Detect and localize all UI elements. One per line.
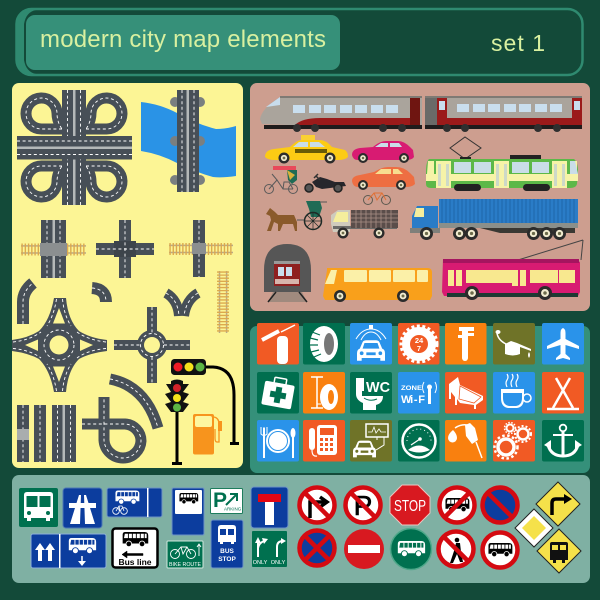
road with rail crossing <box>21 220 86 278</box>
sign: only lanes: ONLY <box>271 560 286 566</box>
merging road <box>166 293 198 316</box>
icon: WC <box>350 372 392 414</box>
icon: fire extinguisher <box>257 323 299 364</box>
icon: fuel nozzle <box>445 420 486 462</box>
vertical rail track <box>217 271 229 333</box>
panel: vehicles <box>250 83 590 311</box>
sign: stop: STOP <box>394 498 426 515</box>
sign: no right turn <box>300 488 334 522</box>
icon: 24/7 service: 7 <box>417 344 421 353</box>
straight road with crosswalk <box>17 405 29 462</box>
sign: lanes with bus <box>31 534 106 568</box>
sweeping road <box>110 379 158 428</box>
sign: bus stop: BUS <box>220 548 235 555</box>
icon: telephone <box>303 420 345 462</box>
icon: tyre <box>303 323 345 364</box>
title banner <box>26 15 340 70</box>
sign: no parking <box>346 488 380 522</box>
icon: camping tent <box>542 372 584 414</box>
sign: only lanes: ONLY <box>253 560 268 566</box>
small bend <box>92 288 106 302</box>
icon: airplane <box>542 323 584 364</box>
icon: WC: WC <box>366 379 390 396</box>
curved road <box>23 283 33 324</box>
sign: bus route <box>390 528 432 570</box>
sign: no pedestrians <box>438 532 474 566</box>
sign: parking <box>210 488 242 514</box>
icon: 24/7 service: 24 <box>415 336 424 345</box>
trolleybus <box>442 240 583 300</box>
sign: bike route: BIKE ROUTE <box>169 562 202 568</box>
bicycle <box>364 193 390 204</box>
overpass over river <box>141 90 236 192</box>
traffic light on arm <box>171 359 239 445</box>
straight road <box>34 405 46 462</box>
icon: car wash <box>350 323 392 364</box>
icon: anchor <box>542 420 584 462</box>
sign: priority road <box>515 509 553 547</box>
icon: fuel pump <box>193 414 222 454</box>
container truck <box>410 199 578 240</box>
orange car <box>352 167 415 190</box>
title: modern city map elements <box>40 26 326 53</box>
sign: no stopping <box>300 530 334 566</box>
small roundabout <box>114 307 190 383</box>
sign: green bus <box>19 488 58 527</box>
high speed train <box>260 96 582 132</box>
cloverleaf interchange <box>17 90 132 205</box>
sign: no buses <box>440 488 474 522</box>
crossroad <box>96 220 154 278</box>
orange bus <box>323 268 432 302</box>
icon: wi-fi zone <box>398 372 440 414</box>
cycle rickshaw <box>264 166 298 194</box>
icon: wi-fi zone: ZONE <box>401 385 423 392</box>
sign: bus stop: STOP <box>218 556 236 563</box>
traffic light on pole <box>165 380 189 465</box>
sign: bus warning <box>537 529 581 573</box>
sign: bus line <box>112 528 158 568</box>
icon: speedometer <box>398 420 440 462</box>
sign: dead end <box>251 487 288 528</box>
sign: no entry <box>344 529 384 569</box>
flatbed truck <box>331 210 398 238</box>
sign: bend warning <box>536 482 580 526</box>
icon: bed <box>445 372 486 414</box>
horse and carriage <box>266 201 327 231</box>
icon: gears <box>493 420 535 462</box>
sign: parking: P <box>213 489 227 512</box>
icon: coffee cup <box>493 372 535 414</box>
icon: oil can <box>493 323 535 364</box>
icon: restaurant <box>257 420 299 462</box>
sign: only lanes <box>252 531 287 567</box>
sign: no parking: P <box>354 490 372 521</box>
icon: 24/7 service <box>398 323 440 364</box>
pink car <box>352 141 414 163</box>
sign: bus line: Bus line <box>118 557 152 567</box>
panel: road signs <box>12 475 590 583</box>
sign: bike route <box>167 541 203 568</box>
tram <box>426 137 578 191</box>
loop road <box>82 397 141 458</box>
sign: buses only <box>482 532 518 568</box>
big roundabout <box>12 298 107 392</box>
sign: bus and bike lane <box>107 488 162 517</box>
icon: first aid kit <box>257 372 299 414</box>
set label: set 1 <box>491 30 545 56</box>
road with rail crossing, narrow <box>169 220 233 277</box>
taxi <box>265 135 348 164</box>
icon: wrench <box>445 323 486 364</box>
panel: service icons <box>250 323 590 473</box>
dual carriageway <box>52 405 76 462</box>
sign: no parking blue <box>482 488 518 522</box>
sign: motorway <box>63 488 102 528</box>
icon: car diagnostics <box>350 420 392 462</box>
panel: roads <box>12 83 243 468</box>
motorbike <box>305 174 346 192</box>
sign: bus stop flag <box>172 488 204 535</box>
icon: wi-fi zone: Wi - F <box>401 394 425 406</box>
icon: tyre pump <box>303 372 345 414</box>
sign: stop <box>390 485 430 525</box>
header frame <box>16 9 582 75</box>
sign: parking: ARKING <box>224 506 242 512</box>
sign: bus stop <box>211 520 243 568</box>
metro train in tunnel <box>264 244 311 302</box>
